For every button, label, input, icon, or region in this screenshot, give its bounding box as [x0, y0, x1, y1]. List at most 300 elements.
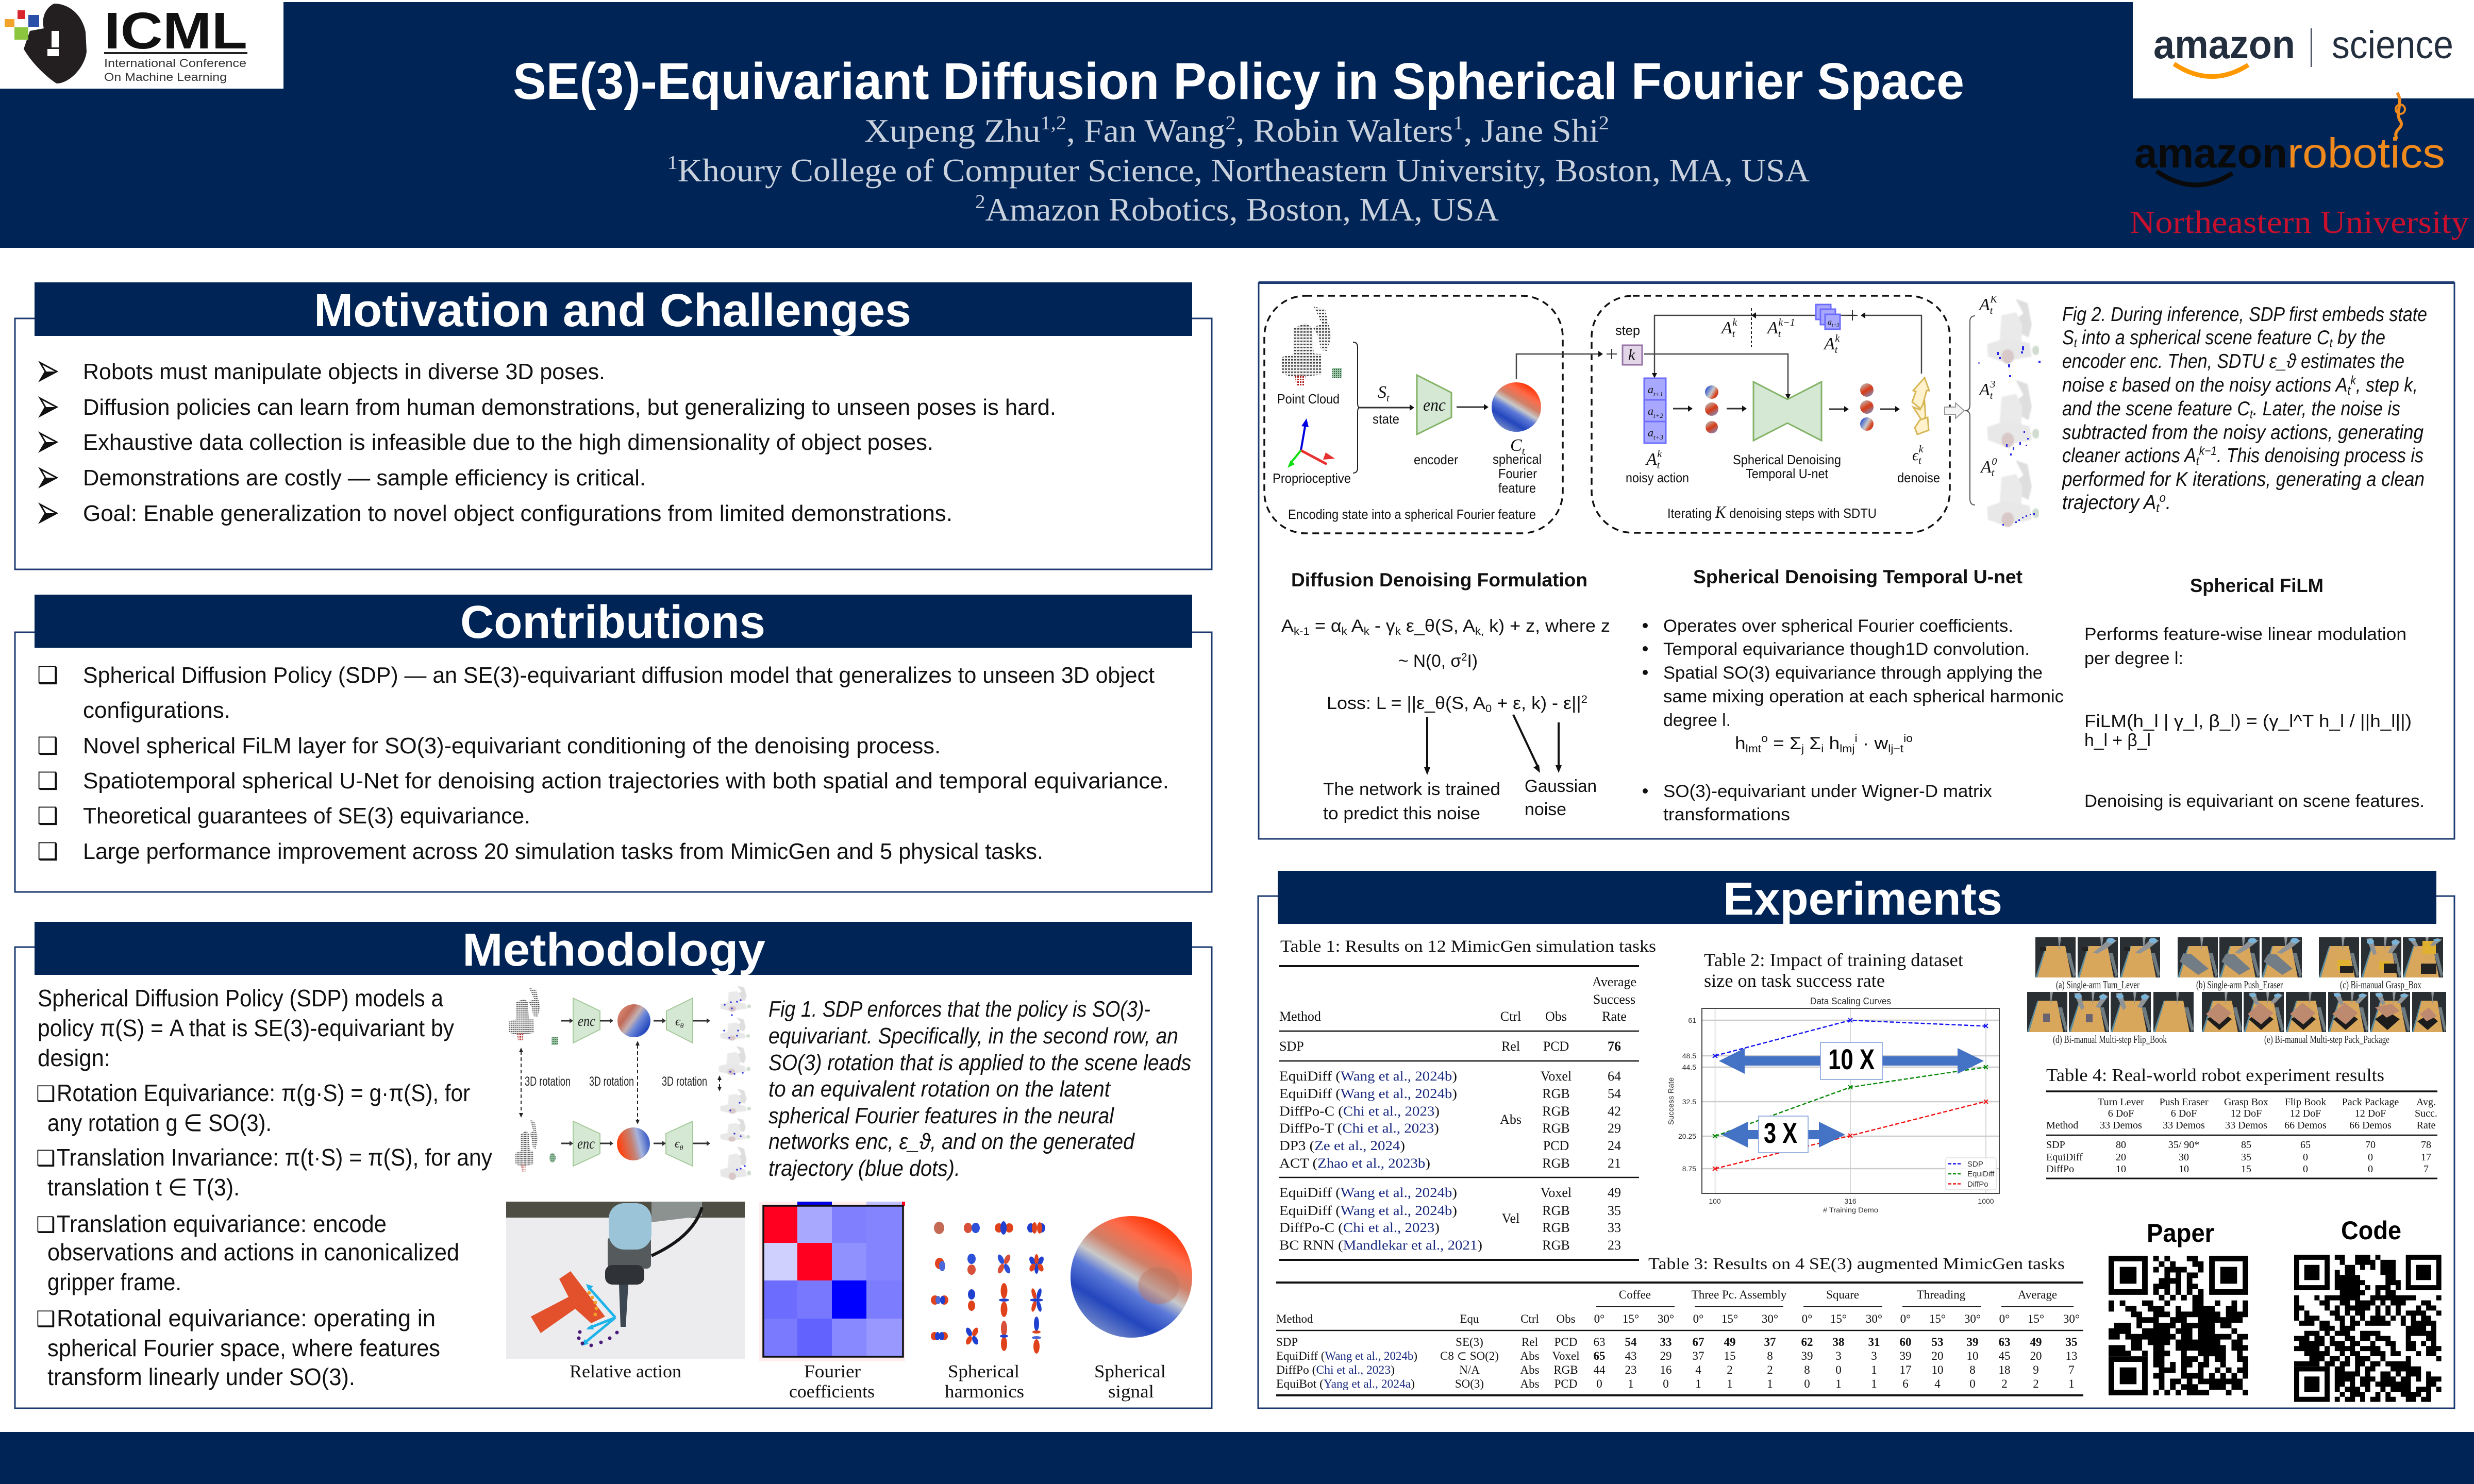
table 3: SE(3) augmented results: 8 [1804, 1363, 1810, 1376]
captions: task photos: (b) Single-arm Push_Eraser [2196, 979, 2283, 991]
table 3: SE(3) augmented results: 0° [1693, 1312, 1703, 1325]
logo: ICML [0, 0, 283, 89]
table 3: SE(3) augmented results: 4 [1934, 1377, 1941, 1390]
line chart: data scaling curves: 44.5 [1682, 1063, 1696, 1071]
table 3: SE(3) augmented results: SE(3) [1456, 1336, 1483, 1348]
figure 2 caption: t [2347, 384, 2351, 398]
table 3: SE(3) augmented results: 15° [1830, 1312, 1847, 1325]
table 1: MimicGen simulation results: RGB [1542, 1220, 1570, 1235]
text block: methodology description: ❑ [36, 1081, 56, 1106]
table 4: real-world results: 10 [2179, 1163, 2189, 1175]
text block: methodology description: ❑ [36, 1145, 56, 1171]
panel: methodology [15, 922, 1212, 1408]
line chart: data scaling curves: 316 [1844, 1197, 1857, 1205]
table 1: MimicGen simulation results: DP3 ( Ze et al., 2024 ) [1279, 1138, 1405, 1153]
bullet list: contributions: ❑ [37, 661, 58, 689]
figure 2: denoising block: Spherical Denoising [1733, 452, 1841, 467]
column: spherical denoising temporal U-net: = Σ [1768, 734, 1801, 753]
authors and affiliations: 2 [1599, 112, 1609, 134]
table 4: real-world results: 0 [2303, 1152, 2308, 1163]
column: spherical denoising temporal U-net: Operates over spherical Fourier coefficients. [1663, 616, 2013, 636]
captions: task photos [2053, 979, 2421, 1045]
figure 2: denoising block: t+2 [1653, 412, 1663, 419]
table 3: SE(3) augmented results: 29 [1660, 1350, 1672, 1362]
table 3: SE(3) augmented results: 31 [1868, 1336, 1880, 1348]
captions: methodology figures: Relative action [570, 1361, 681, 1381]
figure 1 caption: equivariant. Specifically, in the second row, an [768, 1023, 1178, 1049]
figure 1: equivariance diagram [509, 986, 751, 1180]
column: diffusion denoising formulation: The network is trained [1323, 780, 1500, 799]
figure 2: generated trajectories [1965, 294, 2041, 527]
column: diffusion denoising formulation: k, [1475, 626, 1484, 637]
figure 2: denoising block: t [1732, 328, 1735, 340]
table 3: SE(3) augmented results: 1 [2068, 1377, 2075, 1390]
figure 2: generated trajectories: t [1990, 305, 1993, 316]
table 1: MimicGen simulation results: Rate [1602, 1009, 1627, 1024]
table 3: SE(3) augmented results: 3 [1871, 1350, 1877, 1362]
figure 1 caption: SO(3) rotation that is applied to the scene leads [768, 1050, 1191, 1075]
column: spherical denoising temporal U-net: Spatial SO(3) equivariance through applying the [1663, 663, 2043, 683]
table 3: SE(3) augmented results: SO(3) [1455, 1377, 1484, 1390]
column: spherical denoising temporal U-net [1643, 566, 2064, 824]
captions: methodology figures: harmonics [945, 1381, 1024, 1402]
table 3: SE(3) augmented results: 30° [1762, 1312, 1778, 1325]
table 1: MimicGen simulation results: 42 [1608, 1104, 1621, 1119]
table 3: SE(3) augmented results: 8 [1767, 1350, 1773, 1362]
table 1: MimicGen simulation results: SDP [1279, 1039, 1304, 1054]
table 3: SE(3) augmented results: 30° [2063, 1312, 2080, 1325]
table 3: SE(3) augmented results: Rel [1522, 1336, 1538, 1348]
column: spherical denoising temporal U-net: i [1821, 743, 1824, 755]
figure 2 caption [2062, 303, 2427, 515]
table 1: MimicGen simulation results: Vel [1502, 1211, 1519, 1226]
table 4: real-world results: 66 Demos [2349, 1120, 2392, 1131]
bullet list: motivation: Demonstrations are costly — sample efficiency is critical. [83, 465, 646, 491]
table 4: real-world results: 33 Demos [2225, 1120, 2267, 1131]
table 4: real-world results: 78 [2421, 1139, 2431, 1151]
authors and affiliations: Xupeng Zhu [864, 112, 1030, 149]
column: spherical denoising temporal U-net: lmj [1840, 743, 1854, 755]
table 4: real-world results: 0 [2368, 1152, 2373, 1163]
authors and affiliations: , Fan Wang [1066, 112, 1225, 149]
figure 1: equivariance diagram: enc [578, 1013, 595, 1030]
figure 2: denoising block: k [1919, 444, 1924, 455]
table 3: SE(3) augmented results: Abs [1520, 1377, 1540, 1390]
QR code: paper [2109, 1258, 2248, 1393]
table 3: SE(3) augmented results: 1 [1727, 1377, 1733, 1390]
column: diffusion denoising formulation: - γ [1369, 616, 1395, 636]
figure 1 caption: spherical Fourier features in the neural [768, 1103, 1114, 1128]
logo: amazon robotics: amazon [2134, 130, 2287, 177]
figure 1: equivariance diagram: ϵ [675, 1137, 680, 1151]
figure 2: denoising block: θ [1787, 409, 1792, 419]
column: spherical FiLM: h_l + β_l [2084, 731, 2151, 750]
figure 2: encoding block: Proprioceptive [1273, 470, 1351, 486]
table 4: real-world results: EquiDiff [2046, 1152, 2083, 1163]
figure 2: generated trajectories: A [1981, 458, 1992, 477]
authors and affiliations: 1 [1453, 112, 1463, 134]
table 3: SE(3) augmented results: 16 [1660, 1363, 1672, 1376]
figure 2: encoding block: Encoding state into a spherical Fourier feature [1288, 507, 1536, 522]
bullet list: contributions: Novel spherical FiLM layer for SO(3)-equivariant conditioning of the denoising process. [83, 733, 941, 758]
text block: methodology description [36, 985, 492, 1390]
figure 2: encoding block: state [1373, 411, 1399, 427]
table 4: real-world results: 17 [2421, 1152, 2431, 1163]
table 3: SE(3) augmented results: 60 [1900, 1336, 1911, 1348]
table 1: MimicGen simulation results: 23 [1608, 1238, 1621, 1253]
figure 2: denoising block: A [1646, 450, 1657, 469]
figure 2: encoding block: t [1386, 393, 1390, 404]
figure 2: denoising block: step [1615, 323, 1640, 338]
table 4: real-world results: 0 [2303, 1163, 2308, 1175]
figure 2: denoising block: t [1657, 460, 1660, 471]
table 3: SE(3) augmented results: 20 [2030, 1350, 2042, 1362]
column: diffusion denoising formulation: to predict this noise [1323, 804, 1480, 823]
text block: methodology description: design: [38, 1044, 110, 1071]
table 4: real-world results: DiffPo [2046, 1163, 2074, 1175]
table 3: SE(3) augmented results: 2 [1767, 1363, 1773, 1376]
table 3: SE(3) augmented results: 54 [1625, 1336, 1637, 1348]
authors and affiliations: 1 [667, 152, 678, 174]
table 3: SE(3) augmented results: 0 [1804, 1377, 1810, 1390]
table 3: SE(3) augmented results: 2 [1727, 1363, 1733, 1376]
column: spherical denoising temporal U-net: SO(3)-equivariant under Wigner-D matrix [1663, 782, 1992, 801]
line chart: data scaling curves: 61 [1688, 1016, 1696, 1024]
table 3: SE(3) augmented results: Obs [1556, 1312, 1576, 1325]
figure 2: denoising block: t+1 [1653, 390, 1663, 398]
heading: contributions: Contributions [460, 597, 765, 648]
figure 2: denoising block: noisy action [1626, 470, 1689, 485]
figure 2: encoding block: t [1522, 446, 1525, 457]
figure 1: equivariance diagram: enc [577, 1135, 595, 1152]
authors and affiliations: , Jane Shi [1463, 112, 1599, 149]
table 3: SE(3) augmented results: 6 [1902, 1377, 1909, 1390]
table 3: SE(3) augmented results: 30° [1658, 1312, 1674, 1325]
table 3: SE(3) augmented results: 1 [1695, 1377, 1701, 1390]
column: spherical FiLM: FiLM(h_l | γ_l, β_l) = (γ_l^T h_l / ||h_l||) [2084, 712, 2412, 731]
logo: amazon science: science [2332, 23, 2453, 67]
table 3: SE(3) augmented results: 9 [2033, 1363, 2039, 1376]
table 4: real-world results: 35 [2241, 1152, 2251, 1163]
table 3: SE(3) augmented results: 18 [1999, 1363, 2010, 1376]
table 3: SE(3) augmented results: Table 3: Results on 4 SE(3) augmented MimicGen tasks [1648, 1254, 2065, 1273]
table 1: MimicGen simulation results: DiffPo-T ( Chi et al., 2023 ) [1279, 1121, 1439, 1136]
table 3: SE(3) augmented results: Method [1276, 1312, 1313, 1325]
table 3: SE(3) augmented results: 39 [1801, 1350, 1813, 1362]
bullet list: contributions [37, 661, 1169, 865]
table 1: MimicGen simulation results: RGB [1542, 1121, 1570, 1136]
photo: relative action [506, 1202, 745, 1359]
figure 2: encoding block: C [1510, 436, 1522, 455]
arrow: 10X sample efficiency: 10 X [1828, 1043, 1875, 1075]
table 3: SE(3) augmented results: 0 [1663, 1377, 1669, 1390]
table 4: real-world results: Method [2046, 1120, 2078, 1131]
text block: methodology description: Rotational equivariance: operating in [57, 1305, 436, 1331]
table 4: real-world results: Turn Lever [2098, 1097, 2144, 1108]
heading: contributions [35, 595, 1192, 648]
icon: spherical signal [1071, 1216, 1192, 1338]
authors and affiliations: 1,2 [1041, 112, 1066, 134]
figure 2: denoising block: k−1 [1778, 317, 1795, 328]
column: diffusion denoising formulation: Loss: L = ||ε_θ(S, A [1327, 694, 1477, 713]
footer bar [0, 1432, 2474, 1484]
authors and affiliations: 2 [975, 191, 985, 213]
bullet list: motivation: Diffusion policies can learn from human demonstrations, but generalizing to unseen poses is hard. [83, 395, 1056, 420]
column: diffusion denoising formulation: k) + z, where z [1484, 616, 1610, 636]
table 1: MimicGen simulation results: Obs [1545, 1009, 1567, 1024]
table 4: real-world results: Avg. [2416, 1097, 2436, 1108]
table 3: SE(3) augmented results: 0 [1596, 1377, 1602, 1390]
table 1: MimicGen simulation results: DiffPo-C ( Chi et al., 2023 ) [1279, 1220, 1440, 1235]
column: diffusion denoising formulation: 2 [1581, 694, 1587, 705]
text block: methodology description: Translation Invariance: π(t·S) = π(S), for any [57, 1144, 492, 1171]
table 3: SE(3) augmented results: 1 [1871, 1363, 1877, 1376]
column: spherical denoising temporal U-net: o [1761, 733, 1768, 745]
text block: methodology description: translation t ∈ T(3). [47, 1174, 240, 1201]
header banner [0, 2, 2474, 248]
column: diffusion denoising formulation: noise [1525, 800, 1566, 819]
table 4: real-world results: Grasp Box [2224, 1097, 2268, 1108]
column: diffusion denoising formulation: A [1347, 616, 1364, 636]
table 3: SE(3) augmented results: C8 ⊂ SO(2) [1440, 1350, 1499, 1362]
column: diffusion denoising formulation: Gaussian [1525, 777, 1597, 796]
table 2: title: size on task success rate [1704, 970, 1885, 991]
figure 2 caption: k−1 [2199, 444, 2217, 458]
table 3: SE(3) augmented results: 1 [1767, 1377, 1773, 1390]
figure 2: denoising block: A [1767, 318, 1778, 338]
captions: methodology figures: signal [1108, 1381, 1154, 1402]
figure 2: encoding block [1264, 296, 1563, 533]
figure 2: encoding block: Point Cloud [1277, 391, 1340, 407]
line chart: data scaling curves: 8.75 [1682, 1165, 1696, 1173]
logo: ICML: ICML [104, 2, 247, 60]
bullet list: contributions: configurations. [83, 698, 230, 723]
table 1: MimicGen simulation results: Rel [1501, 1039, 1520, 1054]
column: spherical denoising temporal U-net: lj−t [1888, 743, 1903, 755]
table 1: MimicGen simulation results: Success [1593, 992, 1635, 1007]
column: diffusion denoising formulation: k [1342, 626, 1347, 637]
table 4: real-world results: Flip Book [2285, 1097, 2326, 1108]
table 4: real-world results: 30 [2179, 1152, 2189, 1163]
table 2: title [1704, 950, 1963, 991]
authors and affiliations [667, 112, 1810, 228]
table 3: SE(3) augmented results: 13 [2066, 1350, 2077, 1362]
figure 1 caption [768, 997, 1191, 1181]
text block: methodology description: observations and actions in canonicalized [47, 1239, 459, 1266]
table 4: real-world results: Table 4: Real-world robot experiment results [2046, 1065, 2384, 1085]
table 3: SE(3) augmented results: 35 [2066, 1336, 2077, 1348]
table 4: real-world results: Push Eraser [2160, 1097, 2209, 1108]
table 3: SE(3) augmented results: 4 [1695, 1363, 1701, 1376]
heading: experiments [1278, 871, 2436, 925]
table 3: SE(3) augmented results: PCD [1554, 1336, 1577, 1348]
column: diffusion denoising formulation: I) [1467, 651, 1478, 671]
table 4: real-world results: 12 DoF [2290, 1108, 2321, 1119]
column: diffusion denoising formulation: k-1 [1294, 626, 1310, 637]
captions: methodology figures: coefficients [789, 1381, 875, 1402]
table 4: real-world results: 66 Demos [2284, 1120, 2327, 1131]
table 2: title: Table 2: Impact of training dataset [1704, 950, 1963, 970]
table 1: MimicGen simulation results: EquiDiff ( Wang et al., 2024b ) [1279, 1203, 1457, 1218]
column: diffusion denoising formulation: 2 [1461, 651, 1467, 663]
figure 2 caption: . [2166, 492, 2171, 514]
table 3: SE(3) augmented results: Threading [1917, 1288, 1966, 1301]
table 3: SE(3) augmented results: RGB [1553, 1363, 1578, 1376]
figure 2: denoising block: Iterating K denoising steps with SDTU [1667, 503, 1877, 522]
figure 2: denoising block: k [1657, 448, 1662, 460]
figure 2: encoding block: encoder [1414, 452, 1458, 467]
column: spherical denoising temporal U-net: h [1735, 734, 1745, 753]
column: diffusion denoising formulation: A [1281, 616, 1293, 636]
table 4: real-world results: 35/ 90* [2168, 1139, 2199, 1151]
table 4: real-world results: 0 [2368, 1163, 2373, 1175]
line chart: data scaling curves: 1000 [1978, 1197, 1994, 1205]
table 3: SE(3) augmented results: EquiBot (Yang et al., 2024a) [1276, 1377, 1415, 1390]
figure 2 caption: trajectory A [2062, 492, 2163, 514]
column: diffusion denoising formulation [1281, 569, 1610, 823]
table 3: SE(3) augmented results: 0 [1835, 1363, 1842, 1376]
table 4: real-world results: 33 Demos [2163, 1120, 2205, 1131]
line chart: data scaling curves: Success Rate [1667, 1077, 1676, 1125]
table 4: real-world results: 12 DoF [2231, 1108, 2262, 1119]
figure 1: equivariance diagram: 3D rotation [589, 1074, 634, 1089]
line chart: data scaling curves: 48.5 [1682, 1052, 1696, 1060]
table 3: SE(3) augmented results: 62 [1801, 1336, 1813, 1348]
text block: methodology description: any rotation g ∈ SO(3). [47, 1109, 272, 1136]
table 3: SE(3) augmented results: 39 [1967, 1336, 1978, 1348]
text block: methodology description: spherical Fourier space, where features [47, 1335, 440, 1361]
table 1: MimicGen simulation results: PCD [1543, 1039, 1569, 1054]
figure 1 caption: Fig 1. SDP enforces that the policy is SO(3)- [768, 997, 1150, 1022]
table 3: SE(3) augmented results: 15° [1623, 1312, 1639, 1325]
table 3: SE(3) augmented results: DiffPo (Chi et al., 2023) [1276, 1363, 1395, 1376]
table 3: SE(3) augmented results: 1 [1628, 1377, 1634, 1390]
column: spherical denoising temporal U-net: io [1903, 733, 1913, 745]
table 3: SE(3) augmented results: 2 [2001, 1377, 2008, 1390]
logo: amazon robotics [2134, 93, 2445, 185]
figure 2: generated trajectories: 0 [1992, 456, 1997, 467]
bullet list: motivation [40, 359, 1056, 526]
figure 1: equivariance diagram: ϵ [675, 1015, 680, 1028]
bullet list: contributions: Theoretical guarantees of SE(3) equivariance. [83, 803, 530, 829]
table 3: SE(3) augmented results: Square [1826, 1288, 1859, 1301]
table 1: MimicGen simulation results: Ctrl [1500, 1009, 1521, 1024]
table 4: real-world results: SDP [2046, 1139, 2065, 1151]
bullet list: motivation: Robots must manipulate objects in diverse 3D poses. [83, 359, 605, 384]
bullet list: contributions: ❑ [37, 837, 58, 865]
figure 2: encoding block: enc [1423, 396, 1446, 415]
captions: task photos: (c) Bi-manual Grasp_Box [2340, 979, 2421, 991]
arrow: 10X sample efficiency [1719, 1042, 1984, 1080]
table 1: MimicGen simulation results: Abs [1500, 1112, 1522, 1127]
line chart: data scaling curves: 32.5 [1682, 1098, 1696, 1106]
line chart: data scaling curves: SDP [1967, 1160, 1983, 1169]
figure 2: generated trajectories: t [1990, 390, 1993, 401]
bullet list: contributions: Spherical Diffusion Policy (SDP) — an SE(3)-equivariant diffusion model that generalizes to unseen 3D object [83, 663, 1155, 688]
table 1: MimicGen simulation results: 54 [1608, 1086, 1621, 1101]
text block: methodology description: ❑ [36, 1212, 56, 1237]
table 3: SE(3) augmented results: 0° [1802, 1312, 1812, 1325]
logo: amazon science: amazon [2153, 22, 2295, 67]
heading: motivation: Motivation and Challenges [314, 285, 911, 336]
table 3: SE(3) augmented results: 67 [1693, 1336, 1704, 1348]
table 3: SE(3) augmented results: 2 [2033, 1377, 2039, 1390]
table 3: SE(3) augmented results: 44 [1594, 1363, 1606, 1376]
figure 2 caption: encoder enc. Then, SDTU ε_ϑ estimates the [2062, 350, 2404, 373]
column: spherical FiLM: per degree l: [2084, 649, 2183, 668]
bullet list: contributions: ❑ [37, 732, 58, 760]
figure 2: encoding block: spherical [1493, 451, 1542, 467]
figure 2: denoising block: A [1721, 318, 1732, 338]
table 4: real-world results [2046, 1065, 2437, 1178]
arrow: hollow output arrow [1945, 403, 1964, 418]
table 1: MimicGen simulation results: DiffPo-C ( Chi et al., 2023 ) [1279, 1104, 1440, 1119]
QR code: code [2294, 1257, 2442, 1399]
table 3: SE(3) augmented results: 38 [1833, 1336, 1844, 1348]
table 3: SE(3) augmented results: 3 [1835, 1350, 1842, 1362]
figure 2 caption: t [2196, 454, 2200, 468]
table 3: SE(3) augmented results: 1 [1835, 1377, 1842, 1390]
title: SE(3)-Equivariant Diffusion Policy in Spherical Fourier Space [513, 53, 1964, 110]
figure 2: denoising block: ϵ [1781, 400, 1787, 417]
text block: methodology description: transform linearly under SO(3). [47, 1363, 355, 1390]
heading: methodology: Methodology [462, 924, 765, 976]
figure 2: encoding block: feature [1498, 480, 1536, 496]
arrow: 3X sample efficiency: 3 X [1764, 1117, 1797, 1149]
table 3: SE(3) augmented results: 33 [1660, 1336, 1672, 1348]
figure 2: denoising block: denoise [1897, 470, 1940, 485]
table 3: SE(3) augmented results: 0 [1969, 1377, 1976, 1390]
figure 2: denoising block: t [1778, 328, 1781, 340]
table 3: SE(3) augmented results: Voxel [1552, 1350, 1580, 1362]
figure 2: generated trajectories: A [1979, 380, 1990, 399]
table 3: SE(3) augmented results: 15° [1721, 1312, 1738, 1325]
table 3: SE(3) augmented results: 43 [1625, 1350, 1637, 1362]
figure 2 caption: into a spherical scene feature C [2077, 327, 2330, 349]
column: spherical denoising temporal U-net: j [1801, 743, 1804, 755]
figure 2 caption: . Later, the noise is [2253, 398, 2400, 420]
heading: motivation [35, 282, 1192, 336]
figure 1: equivariance diagram: 3D rotation [662, 1074, 707, 1089]
column: diffusion denoising formulation: k [1364, 626, 1369, 637]
table 1: MimicGen simulation results: PCD [1543, 1138, 1569, 1153]
table 1: MimicGen simulation results: RGB [1542, 1156, 1570, 1171]
table 4: real-world results: 12 DoF [2355, 1108, 2386, 1119]
table 3: SE(3) augmented results: 8 [1969, 1363, 1976, 1376]
column: spherical denoising temporal U-net: Σ [1804, 734, 1821, 753]
table 4: real-world results: 7 [2423, 1163, 2429, 1175]
heading: methodology [35, 922, 1192, 976]
heading: experiments: Experiments [1723, 873, 2002, 925]
figure 2 caption: t [2250, 408, 2253, 421]
figure 1 caption: trajectory (blue dots). [768, 1156, 960, 1181]
table 3: SE(3) augmented results: 63 [1594, 1336, 1605, 1348]
column: spherical FiLM: Spherical FiLM [2190, 575, 2323, 596]
figure 2: encoding block: Fourier [1498, 466, 1537, 481]
table 4: real-world results: 85 [2241, 1139, 2251, 1151]
logo: ICML: On Machine Learning [104, 71, 227, 83]
table 3: SE(3) augmented results: 39 [1900, 1350, 1911, 1362]
figure 2 caption: performed for K iterations, generating a clean [2062, 468, 2425, 491]
bullet list: contributions: Spatiotemporal spherical U-Net for denoising action trajectories with both spatial and temporal equivariance. [83, 768, 1169, 794]
line chart: data scaling curves: # Training Demo [1823, 1206, 1878, 1214]
table 3: SE(3) augmented results: 20 [1932, 1350, 1943, 1362]
table 3: SE(3) augmented results: 15° [2028, 1312, 2044, 1325]
logo: amazon robotics: robotics [2287, 130, 2445, 177]
text block: methodology description: Spherical Diffusion Policy (SDP) models a [38, 985, 443, 1011]
table 3: SE(3) augmented results: 15° [1929, 1312, 1946, 1325]
authors and affiliations: 2 [1225, 112, 1236, 134]
